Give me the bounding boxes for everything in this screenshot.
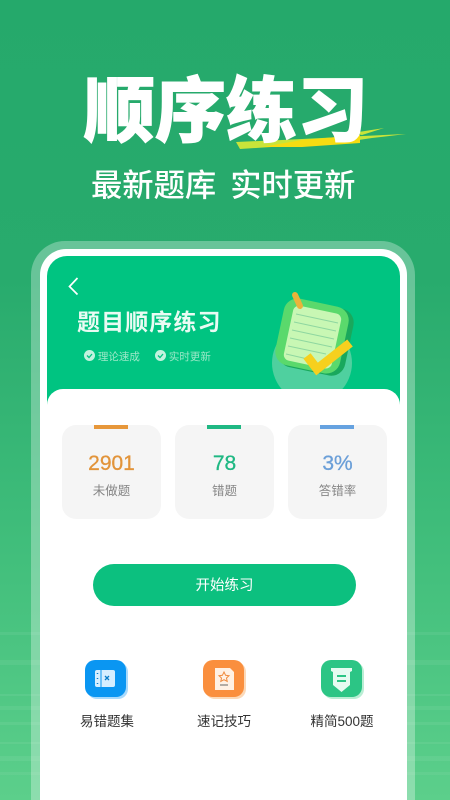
item: selected 500: [310, 660, 374, 729]
tag: theory: [84, 350, 140, 363]
tag: updates: 实时更新: [169, 351, 211, 363]
accent bar: [207, 425, 241, 429]
item: memory tips: [197, 660, 251, 729]
icon: notebook: [85, 660, 128, 699]
header panel: [47, 256, 400, 406]
phone frame: [31, 241, 415, 800]
tag: theory: 理论速成: [98, 351, 140, 363]
icon: shield: [321, 660, 364, 699]
start button: 开始练习: [196, 578, 254, 594]
brush stroke: [236, 128, 406, 149]
tag: updates: [155, 350, 211, 363]
value: 78: [213, 452, 236, 475]
panel title: 题目顺序练习: [77, 309, 222, 335]
stat card: error rate: [288, 425, 387, 519]
label: 速记技巧: [197, 714, 251, 729]
title: 顺序练习: [84, 73, 368, 152]
start button: [93, 564, 356, 606]
accent bar: [94, 425, 128, 429]
accent bar: [320, 425, 354, 429]
phone white body: [40, 249, 407, 800]
subtitle: 最新题库 实时更新: [91, 168, 355, 203]
label: 精简500题: [310, 714, 374, 729]
label: 易错题集: [80, 714, 134, 729]
label: 错题: [212, 484, 237, 498]
value: 3%: [322, 452, 353, 475]
item: wrong set: [80, 660, 134, 729]
value: 2901: [88, 452, 135, 475]
icon: star document: [203, 660, 246, 699]
stat card: wrong: [175, 425, 274, 519]
label: 未做题: [93, 484, 130, 498]
stat card: undone: [62, 425, 161, 519]
content panel: [47, 389, 400, 800]
label: 答错率: [319, 484, 356, 498]
back arrow: [68, 277, 78, 296]
icon: notepad with check: [272, 292, 354, 389]
